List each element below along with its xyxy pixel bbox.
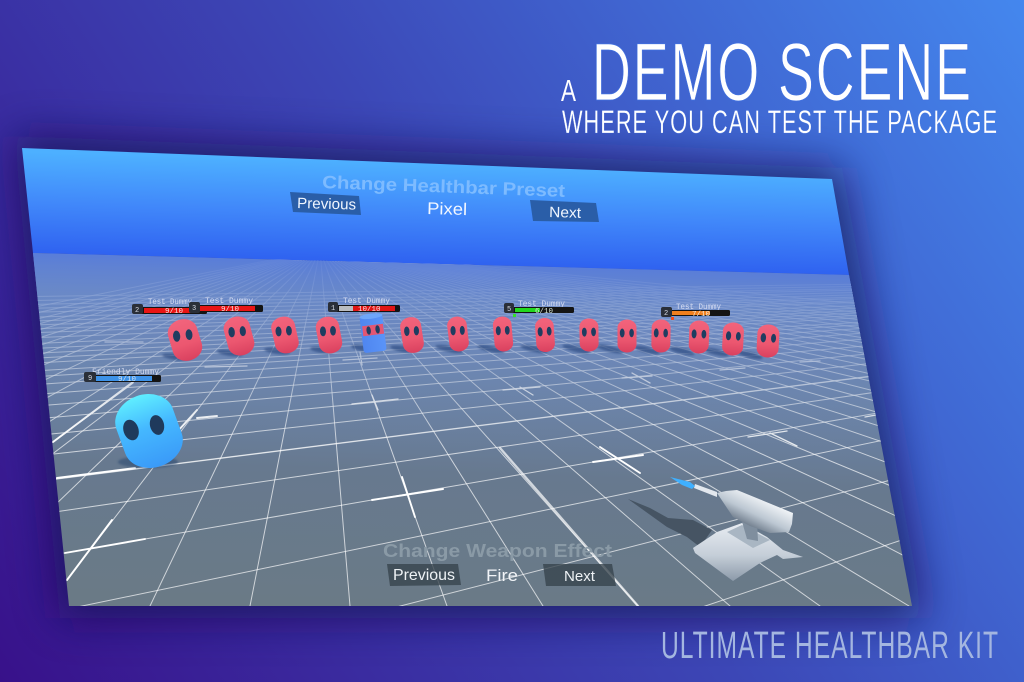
healthbar: test dummy level 2: 9/10 (165, 308, 184, 316)
healthbar: test dummy level 1: 10/10 (358, 306, 381, 314)
healthbar: test dummy level 1: 1 (331, 305, 335, 313)
healthbar: test dummy orange: 7/10 (692, 311, 711, 319)
capsule shadows (162, 343, 763, 362)
button: previous weapon (387, 564, 461, 586)
healthbar: test dummy level 2: Test Dummy (148, 298, 192, 307)
healthbar: test dummy level 3: Test Dummy (205, 297, 253, 306)
button: previous preset: Previous (297, 195, 356, 214)
heading: change weapon effect: Change Weapon Effect (383, 541, 612, 561)
healthbar: test dummy green: 6/10 (535, 308, 554, 316)
enemy dummy capsules (165, 314, 780, 364)
label: current preset pixel: Pixel (427, 199, 467, 219)
sky (22, 148, 849, 275)
turret base plate (727, 525, 770, 548)
healthbar: test dummy green (504, 300, 574, 317)
turret post (741, 518, 758, 541)
title block (561, 27, 998, 140)
healthbar: friendly dummy: 9 (88, 375, 92, 383)
dummy inside blue cylinder (359, 312, 387, 353)
panel: demo scene screenshot (22, 148, 912, 606)
panel drop shadow (14, 136, 924, 618)
healthbar: friendly dummy: Friendly Dummy (92, 368, 159, 377)
healthbar: test dummy orange (661, 303, 730, 320)
healthbar: test dummy green: Test Dummy (518, 300, 565, 309)
button: previous weapon: Previous (393, 567, 455, 584)
healthbar: friendly dummy (84, 368, 161, 384)
turret barrel (717, 490, 793, 533)
healthbar: test dummy level 3 (189, 297, 263, 314)
heading: change healthbar preset: Change Healthbar Preset (322, 172, 565, 201)
turret muzzle (694, 484, 717, 497)
button: next weapon (543, 564, 616, 586)
title word a: A (561, 73, 576, 108)
healthbar: test dummy green: 5 (507, 306, 511, 314)
healthbar: test dummy orange: 2 (664, 310, 668, 318)
button: next preset: Next (549, 204, 582, 222)
turret (628, 477, 803, 581)
healthbar: friendly dummy: 9/10 (118, 376, 137, 384)
healthbar: test dummy level 3: 9/10 (221, 306, 240, 314)
friendly blue dummy capsule (108, 386, 190, 476)
floor grid (37, 260, 910, 606)
button: previous preset (290, 192, 361, 215)
button: next weapon: Next (564, 568, 596, 585)
label: current weapon fire: Fire (486, 566, 518, 585)
healthbar: test dummy level 2: 2 (135, 307, 139, 315)
healthbar: test dummy orange: Test Dummy (676, 303, 721, 312)
healthbar: test dummy level 2 (132, 298, 207, 316)
healthbar: test dummy level 1 (328, 297, 400, 314)
turret projectile tip (670, 477, 695, 489)
button: next preset (530, 200, 599, 222)
healthbar: test dummy level 3: 3 (192, 305, 196, 313)
distance fog (33, 253, 886, 470)
healthbar: test dummy level 1: Test Dummy (343, 297, 390, 306)
turret base (693, 523, 803, 581)
floor (33, 253, 912, 606)
turret shadow (628, 499, 712, 547)
